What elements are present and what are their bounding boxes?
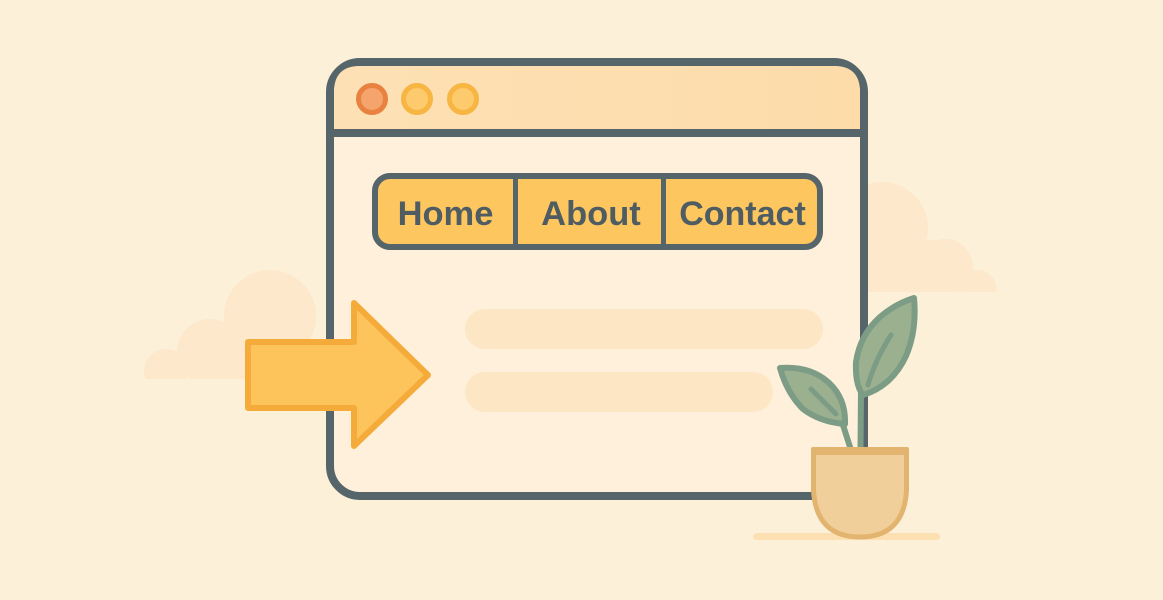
window control dots	[358, 86, 476, 112]
ground shadow	[753, 533, 940, 540]
content placeholder line 1	[465, 309, 823, 349]
menu label: Contact: Contact	[679, 195, 806, 233]
leaf: right vein	[868, 335, 891, 385]
leaf: left vein	[811, 389, 836, 414]
menu divider 2	[661, 176, 666, 247]
red dot	[358, 86, 386, 112]
menu label: Home: Home	[398, 195, 493, 233]
pot	[814, 451, 906, 537]
menu label: About: About	[541, 195, 641, 233]
cloud: right background	[868, 182, 996, 292]
navigation menu	[375, 176, 820, 247]
cloud: left background	[144, 270, 316, 379]
title bar	[334, 66, 860, 129]
menu divider 1	[513, 176, 518, 247]
arrow pointing to the menu	[248, 303, 428, 446]
leaf: right	[856, 298, 915, 395]
title bar divider	[330, 129, 864, 137]
content placeholder line 2	[465, 372, 773, 412]
leaf: left	[780, 368, 845, 424]
stem: main	[858, 390, 864, 450]
potted plant	[780, 298, 915, 537]
yellow dot	[404, 86, 430, 112]
browser window	[330, 62, 864, 496]
window body	[330, 62, 864, 496]
yellow dot 2	[450, 86, 476, 112]
stem: left	[842, 422, 851, 450]
pot rim	[811, 447, 909, 455]
menu bar	[375, 176, 820, 247]
